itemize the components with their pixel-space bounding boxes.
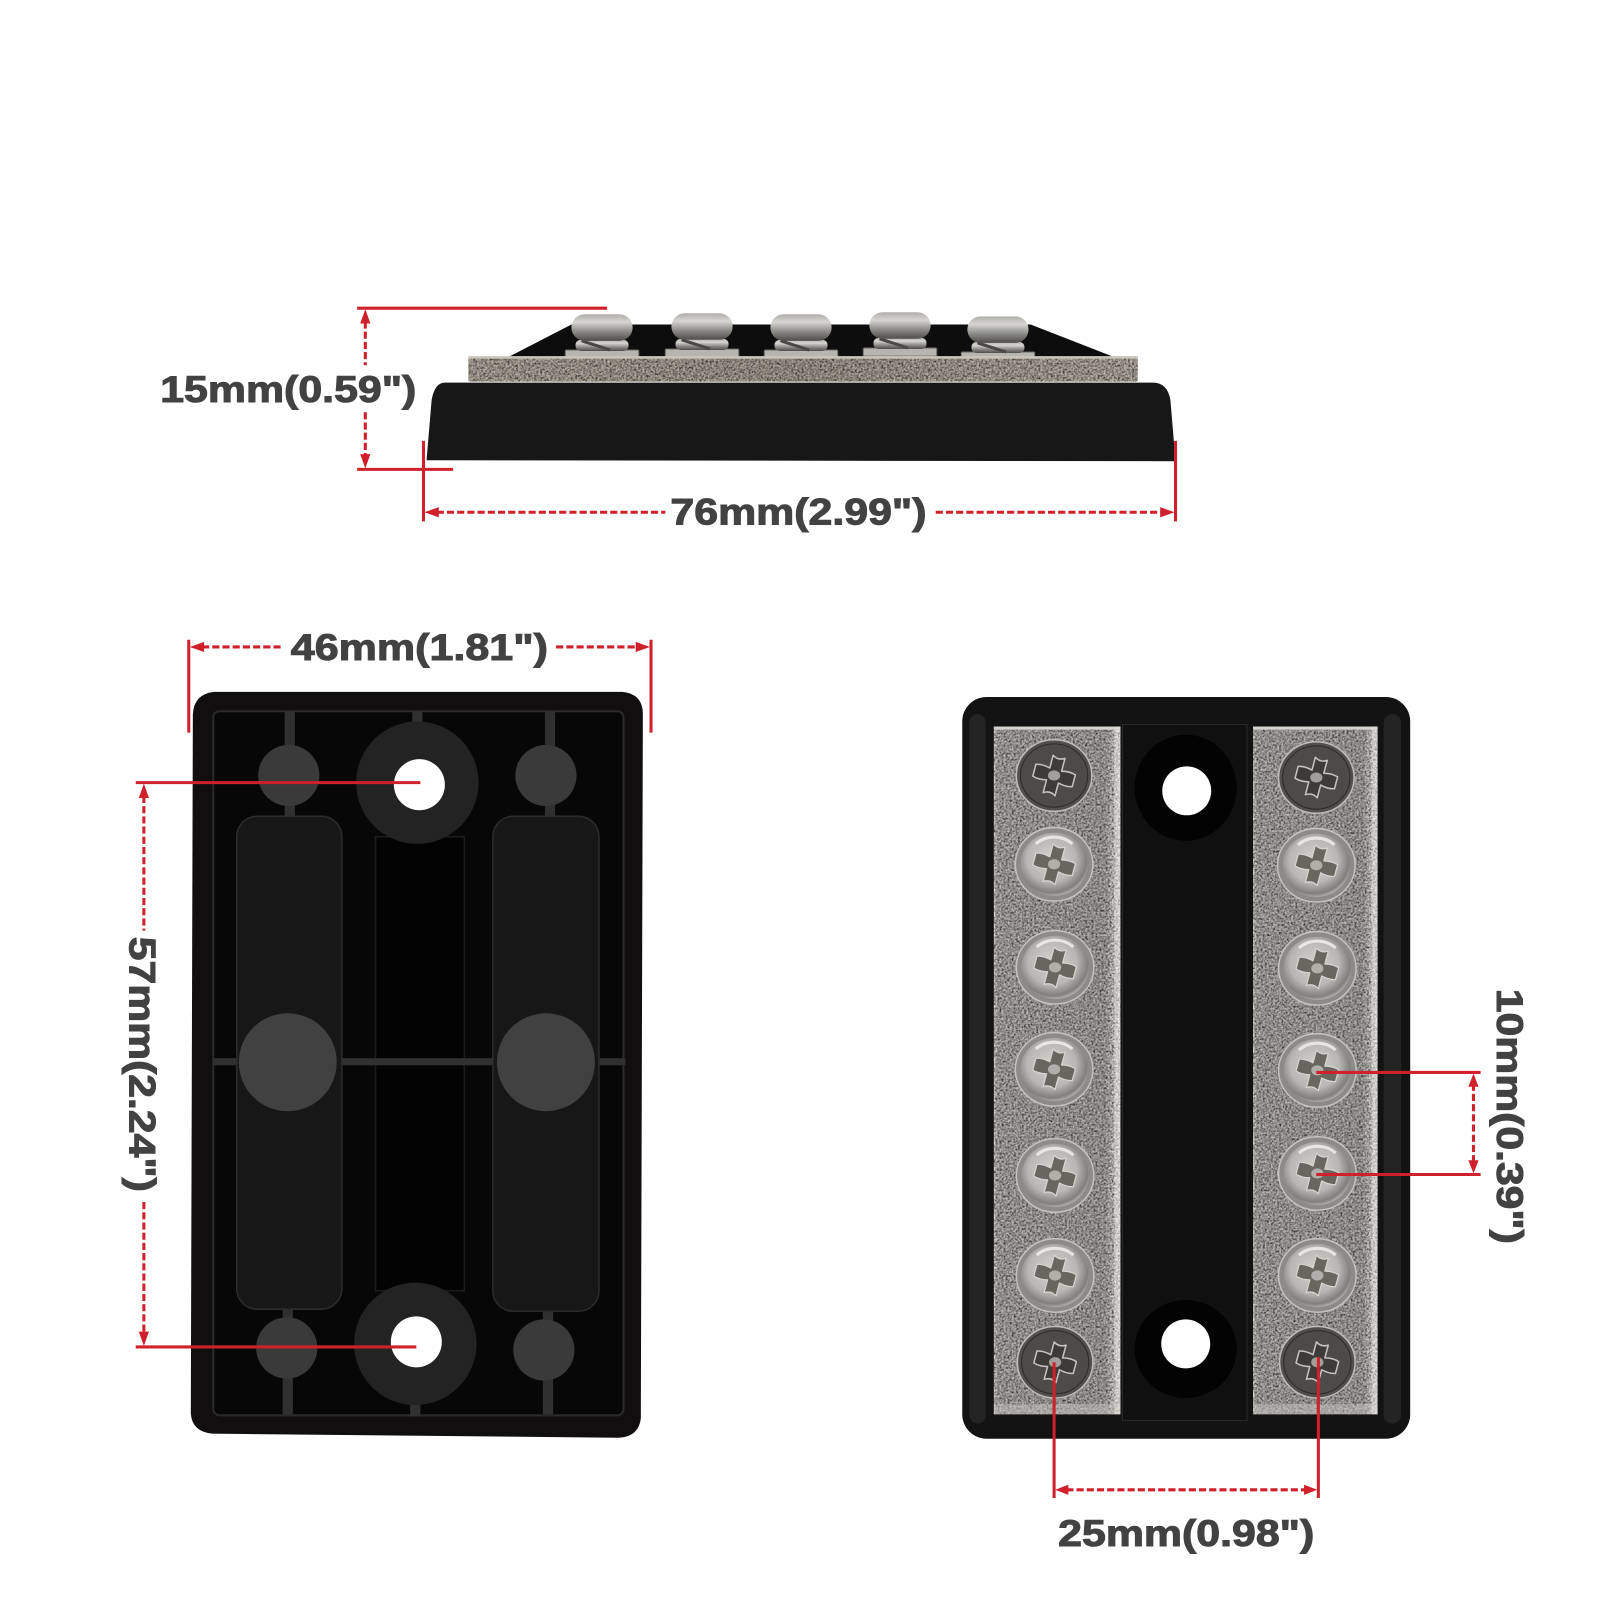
panel: side view of terminal block [427, 312, 1176, 461]
outer housing [191, 692, 643, 1438]
inner recess [213, 711, 623, 1415]
dimension: screw pitch 10mm [1316, 989, 1530, 1244]
dimension: width 46mm: 46mm(1.81") [291, 627, 548, 668]
black plastic base [427, 383, 1176, 461]
centre channel [376, 837, 464, 1291]
raised pad left [237, 816, 342, 1309]
rear face of block [508, 324, 1114, 357]
icon: right screws [1278, 742, 1356, 1398]
centre mounting strip [1122, 724, 1247, 1420]
left metal bar [994, 727, 1120, 1414]
mounting hole bottom [1135, 1300, 1237, 1398]
panel: underside view [191, 692, 643, 1438]
dimension: width 46mm [189, 627, 651, 733]
icon: left screws [1015, 740, 1094, 1398]
raised pad right [493, 816, 599, 1311]
dimension: height 15mm: 15mm(0.59") [160, 369, 416, 410]
dimension: height 57mm [122, 783, 420, 1347]
dimension: height 15mm [160, 308, 607, 469]
centre ejector marks [239, 1013, 337, 1111]
dimension: length 76mm: 76mm(2.99") [670, 491, 927, 532]
icon: five stud screws [565, 312, 1035, 360]
dimension: bar spacing 25mm [1054, 1357, 1318, 1554]
mounting ring bottom [354, 1283, 477, 1405]
metal bus bar edge [468, 356, 1138, 382]
mounting ring top [356, 721, 479, 844]
ribs [213, 711, 626, 1416]
mounting hole top [1135, 735, 1237, 841]
black housing [962, 697, 1410, 1439]
dimension: length 76mm [423, 441, 1176, 532]
dimension: bar spacing 25mm: 25mm(0.98") [1058, 1513, 1314, 1554]
corner ejector marks [256, 745, 577, 1381]
dimension: height 57mm: 57mm(2.24") [122, 937, 163, 1192]
right metal bar [1253, 727, 1378, 1414]
dimension: screw pitch 10mm: 10mm(0.39") [1489, 989, 1530, 1244]
panel: top view of terminal block [962, 697, 1410, 1439]
